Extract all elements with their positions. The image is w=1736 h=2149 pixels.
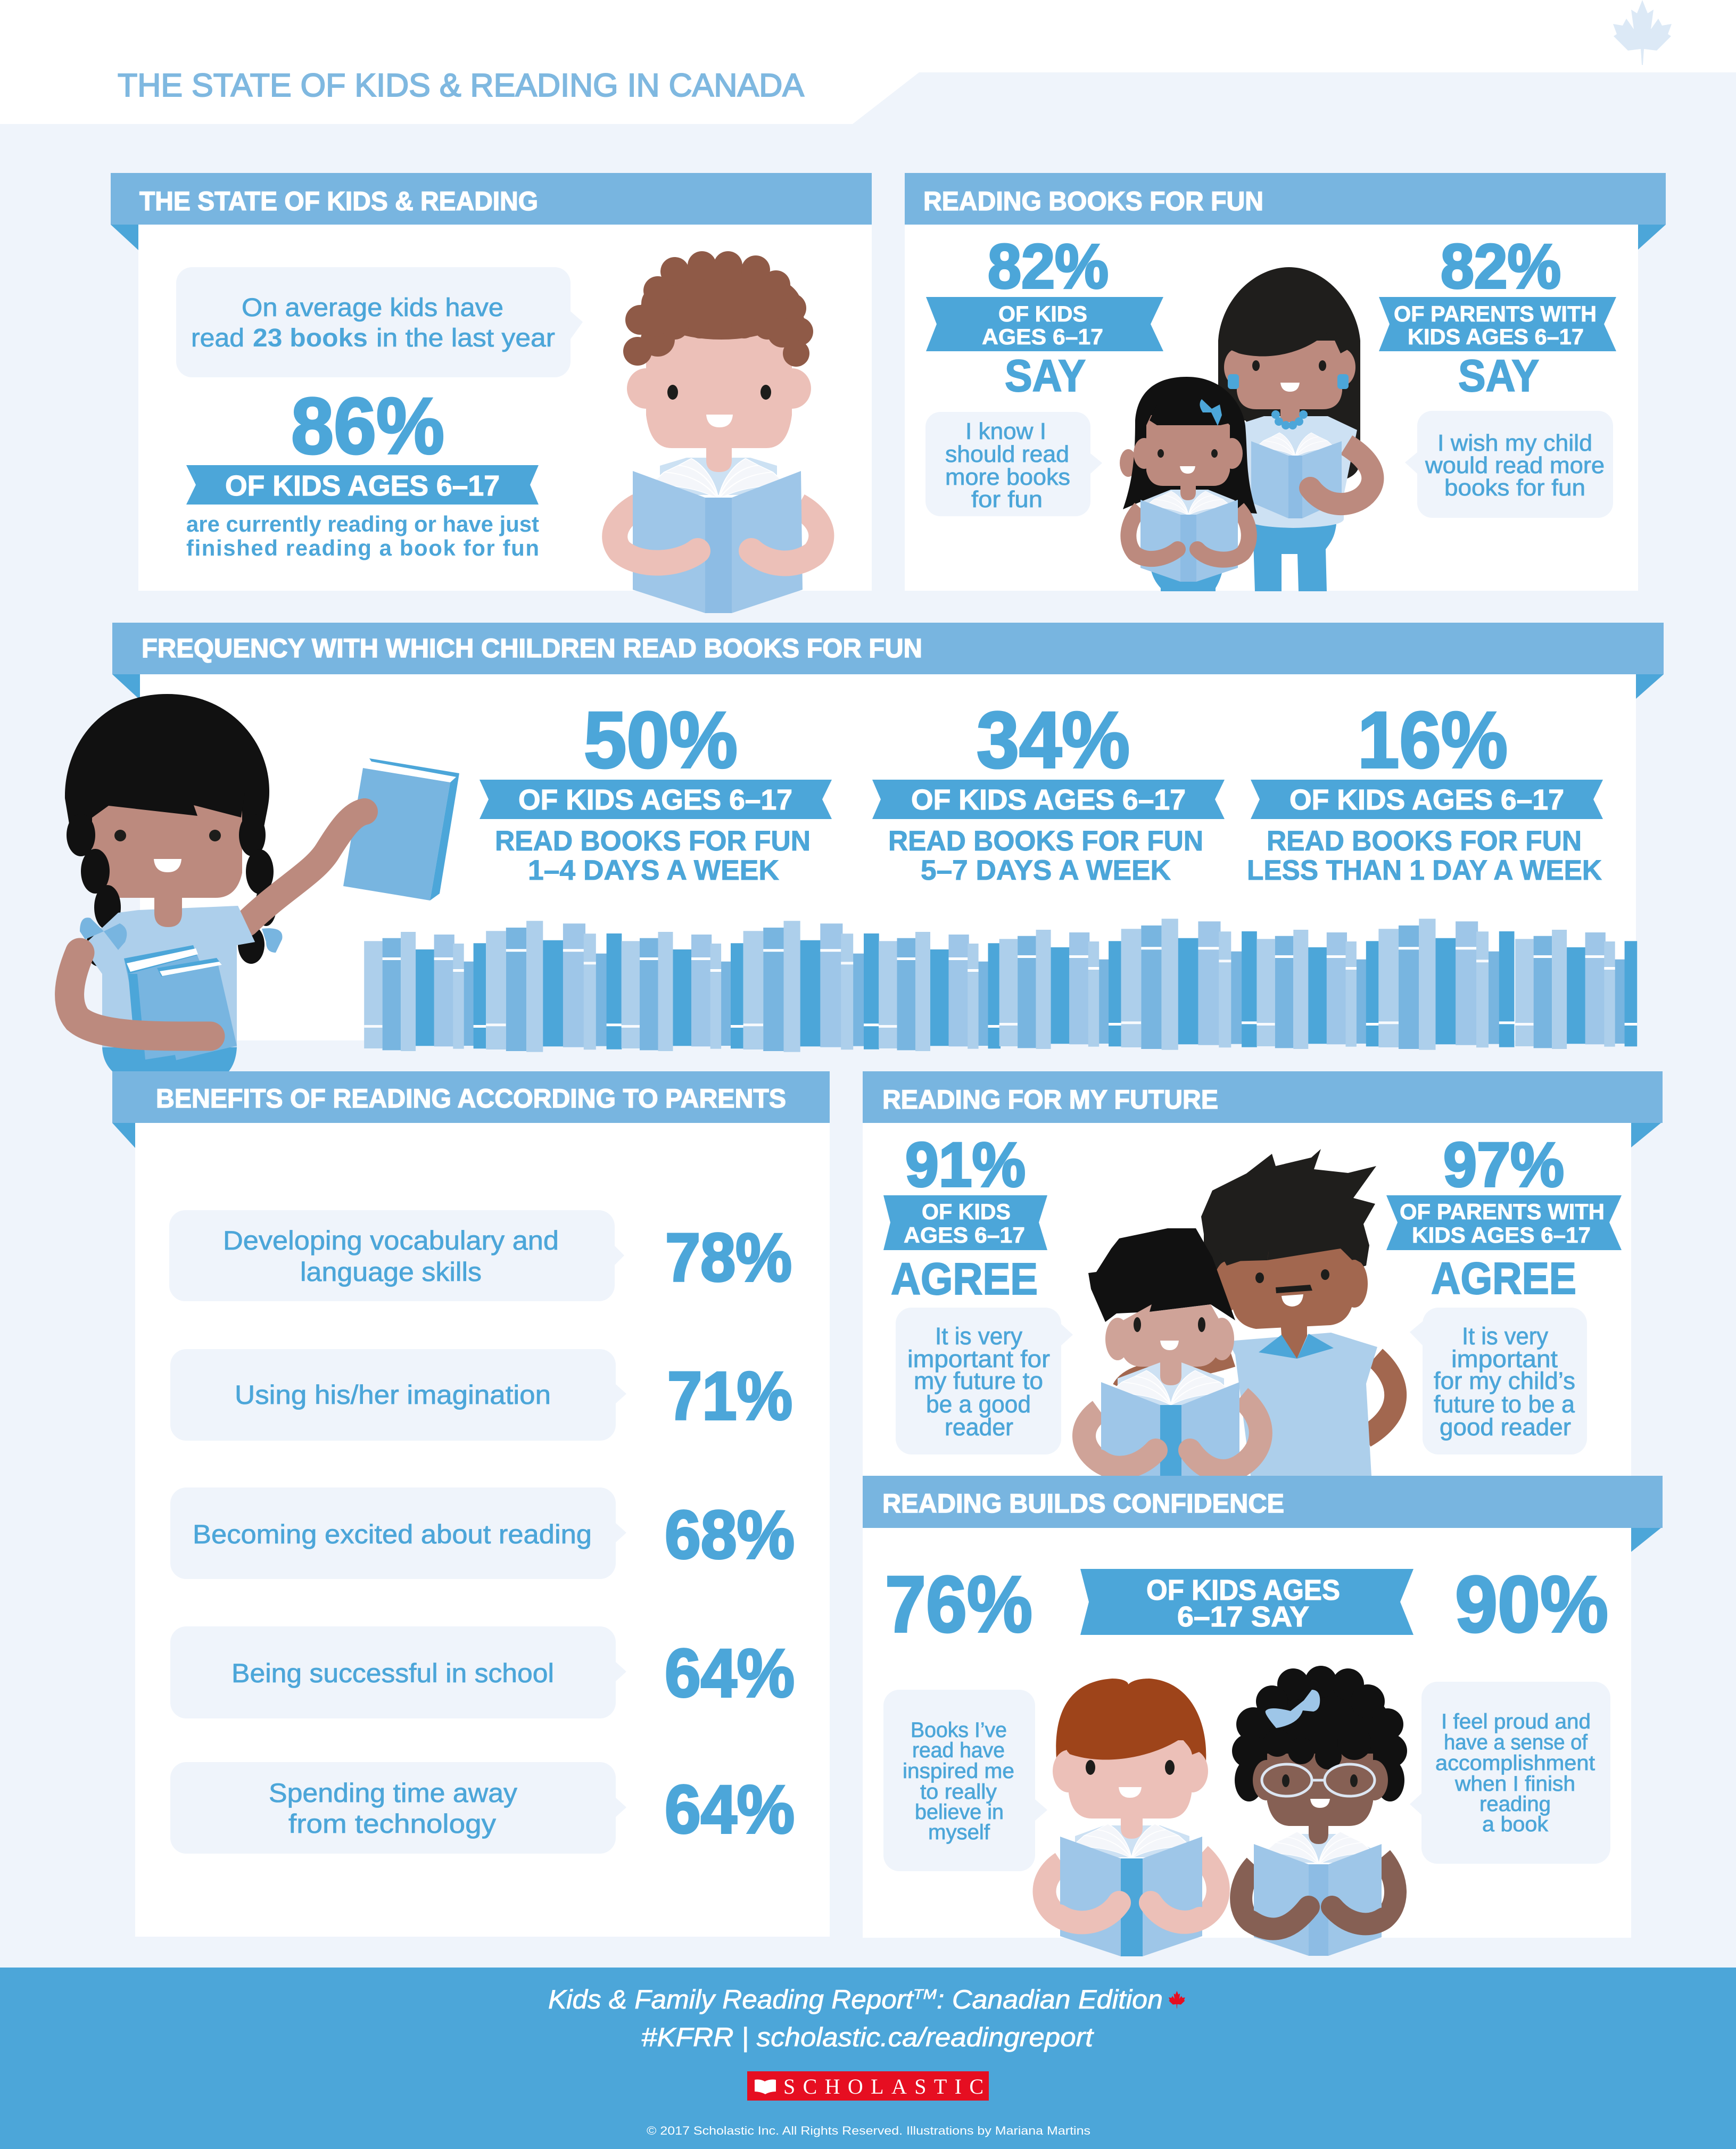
header ribbon: READING BOOKS FOR FUN [923, 186, 1263, 216]
stat: 86%: 86% [291, 381, 444, 470]
ribbon: of parents: KIDS AGES 6–17 [1412, 1222, 1591, 1247]
benefit: school 64% [170, 1626, 795, 1718]
ribbon: of parents: OF PARENTS WITH [1394, 301, 1597, 326]
speech bubble: kids: should read [945, 441, 1069, 467]
ribbon: of kids ages say: OF KIDS AGES [1146, 1574, 1340, 1606]
panel: the state of kids and reading [111, 173, 872, 613]
footer report title: : Canadian Edition [937, 1985, 1163, 2014]
benefit: excited 68% [170, 1487, 795, 1579]
scholastic logo [747, 2071, 989, 2101]
illustration: girl with glasses and book [1232, 1666, 1407, 1956]
speech bubble: kids [896, 1308, 1073, 1454]
top white banner [0, 0, 1736, 124]
speech bubble: proud: when I finish [1454, 1772, 1575, 1796]
speech bubble: kids: more books [945, 464, 1070, 490]
footer [0, 1968, 1736, 2149]
header ribbon: READING BUILDS CONFIDENCE [882, 1489, 1284, 1518]
stat: 50% [480, 695, 832, 886]
illustration: boy with book [1084, 1228, 1261, 1476]
speech bubble: proud: accomplishment [1435, 1751, 1595, 1775]
speech bubble: proud [1410, 1682, 1610, 1864]
footer report title: TM [913, 1986, 937, 2002]
illustration: mother with book [1218, 267, 1373, 591]
say label: SAY [1458, 351, 1539, 401]
stat: 34%: 5–7 DAYS A WEEK [921, 855, 1171, 886]
speech bubble: inspired [883, 1690, 1047, 1871]
text: currently reading: are currently reading or have just [186, 511, 539, 536]
benefit: technology 64%: Spending time away [269, 1778, 517, 1808]
panel: benefits of reading [112, 1071, 830, 1937]
speech bubble: kids: be a good [926, 1391, 1031, 1418]
ribbon: of parents [1386, 1195, 1622, 1250]
illustration: row of books [364, 919, 1637, 1052]
title: THE STATE OF KIDS & READING IN CANADA [118, 67, 804, 103]
speech bubble: inspired: read have [912, 1739, 1005, 1762]
stat: 16%: 16% [1358, 695, 1508, 784]
panel: reading books for fun [905, 173, 1666, 591]
ribbon: of kids ages: AGES 6–17 [904, 1222, 1025, 1247]
benefit: technology 64%: from technology [288, 1809, 496, 1839]
icon: maple leaf [1613, 0, 1672, 65]
ribbon: of kids ages: OF KIDS [998, 301, 1087, 326]
speech bubble: parents [1410, 1308, 1587, 1454]
stat: 97%: 97% [1443, 1130, 1564, 1200]
stat: 16%: READ BOOKS FOR FUN [1267, 825, 1582, 857]
stat: 76%: 76% [885, 1559, 1032, 1649]
ribbon: of kids ages [926, 297, 1163, 351]
speech bubble: parents: It is very [1462, 1323, 1548, 1350]
speech bubble: inspired: Books I’ve [911, 1718, 1007, 1742]
ribbon: of kids ages [883, 1195, 1047, 1250]
header ribbon [111, 173, 872, 250]
speech bubble: inspired: myself [928, 1821, 990, 1844]
speech bubble: kids: reader [945, 1414, 1013, 1441]
header ribbon: BENEFITS OF READING ACCORDING TO PARENTS [156, 1084, 786, 1113]
speech bubble: inspired: believe in [915, 1800, 1004, 1824]
benefit: vocabulary 78% [169, 1210, 792, 1301]
stat: 34%: READ BOOKS FOR FUN [888, 825, 1203, 857]
speech bubble: 23 books: in the last year [376, 324, 555, 352]
benefit: vocabulary 78%: 78% [665, 1220, 792, 1296]
stat: 50%: 1–4 DAYS A WEEK [528, 855, 779, 886]
speech bubble: proud: reading [1479, 1792, 1551, 1816]
icon: red maple leaf [1169, 1991, 1185, 2009]
speech bubble: proud: a book [1482, 1813, 1549, 1836]
stat: 91%: 91% [905, 1130, 1026, 1200]
stat: 82% of kids: 82% [988, 232, 1109, 302]
speech bubble: kids: I know I [965, 418, 1046, 444]
speech bubble: proud: I feel proud and [1441, 1710, 1591, 1733]
speech bubble: proud: have a sense of [1444, 1731, 1588, 1754]
speech bubble: parents: would read more [1425, 452, 1605, 478]
speech bubble: 23 books: 23 books [253, 324, 368, 352]
say label: SAY [1005, 351, 1086, 401]
stat: 50%: OF KIDS AGES 6–17 [518, 784, 792, 816]
scholastic logo: SCHOLASTIC [783, 2074, 983, 2098]
panel: reading builds confidence [863, 1476, 1663, 1956]
speech bubble: inspired: to really [920, 1780, 997, 1804]
footer report title: Kids & Family Reading Report [548, 1985, 914, 2014]
ribbon: of parents: OF PARENTS WITH [1400, 1199, 1605, 1224]
benefit: school 64%: Being successful in school [232, 1658, 554, 1688]
stat: 50%: READ BOOKS FOR FUN [495, 825, 811, 857]
ribbon: of kids ages say [1080, 1569, 1413, 1635]
speech bubble: kids: important for [907, 1345, 1050, 1373]
speech bubble: kids: my future to [914, 1367, 1043, 1394]
speech bubble: parents [1405, 411, 1613, 518]
speech bubble: parents: books for fun [1444, 475, 1585, 501]
benefit: vocabulary 78%: Developing vocabulary and [223, 1226, 559, 1255]
stat: 16%: OF KIDS AGES 6–17 [1289, 784, 1564, 816]
stat: 16% [1247, 695, 1603, 886]
ribbon: of kids ages say: 6–17 SAY [1177, 1601, 1309, 1633]
stat: 34% [872, 695, 1225, 886]
header ribbon: FREQUENCY WITH WHICH CHILDREN READ BOOKS FOR FUN [142, 633, 922, 663]
speech bubble: parents: future to be a [1434, 1391, 1575, 1418]
speech bubble: kids: It is very [935, 1323, 1022, 1350]
benefit: school 64%: 64% [665, 1635, 795, 1712]
benefit: technology 64% [170, 1762, 795, 1854]
ribbon: of parents [1379, 297, 1616, 351]
panel: reading for my future [863, 1071, 1663, 1476]
copyright: © 2017 Scholastic Inc. All Rights Reserved. Illustrations by Mariana Martins [647, 2124, 1090, 2137]
speech bubble: 23 books: read [191, 324, 244, 352]
speech bubble: parents: for my child’s [1434, 1367, 1575, 1394]
benefit: imagination 71%: Using his/her imagination [235, 1380, 551, 1410]
ribbon: of kids ages: AGES 6–17 [982, 324, 1103, 349]
agree label: AGREE [1431, 1253, 1576, 1303]
speech bubble: parents: good reader [1440, 1414, 1571, 1441]
stat: 34%: 34% [977, 695, 1130, 784]
speech bubble: parents: important [1451, 1345, 1558, 1373]
header ribbon [863, 1476, 1663, 1552]
illustration: daughter with book [1120, 377, 1257, 591]
text: currently reading [186, 511, 539, 560]
header ribbon [112, 1071, 830, 1148]
header ribbon: READING FOR MY FUTURE [882, 1085, 1218, 1114]
header ribbon [905, 173, 1666, 250]
header ribbon [863, 1071, 1663, 1147]
speech bubble: 23 books [176, 267, 583, 377]
benefit: vocabulary 78%: language skills [300, 1257, 482, 1287]
speech bubble: parents: I wish my child [1437, 430, 1592, 456]
illustration: father [1122, 1149, 1395, 1476]
benefit: imagination 71% [170, 1349, 792, 1441]
illustration: curly haired boy with book [615, 251, 821, 613]
text: currently reading: finished reading a book for fun [186, 535, 539, 560]
footer report title [548, 1985, 1163, 2014]
benefit: imagination 71%: 71% [667, 1358, 792, 1434]
header ribbon [112, 623, 1664, 700]
speech bubble: 23 books: On average kids have [242, 294, 503, 322]
ribbon: of kids ages: OF KIDS [922, 1199, 1011, 1224]
ribbon: of parents: KIDS AGES 6–17 [1408, 324, 1584, 349]
stat: 50%: 50% [584, 695, 738, 784]
panel: frequency of reading [112, 623, 1664, 1052]
stat: 90%: 90% [1455, 1559, 1608, 1649]
benefit: technology 64%: 64% [665, 1772, 795, 1848]
footer link: #KFRR | scholastic.ca/readingreport [641, 2022, 1094, 2053]
speech bubble: inspired: inspired me [903, 1759, 1014, 1783]
speech bubble: kids: for fun [971, 486, 1043, 513]
benefit: excited 68%: Becoming excited about reading [193, 1519, 592, 1549]
ribbon: of kids ages: OF KIDS AGES 6–17 [225, 470, 500, 502]
illustration: red haired boy with book [1044, 1679, 1218, 1956]
stat: 82% of parents: 82% [1441, 232, 1561, 302]
speech bubble: kids [925, 412, 1102, 516]
stat: 34%: OF KIDS AGES 6–17 [911, 784, 1186, 816]
header ribbon: THE STATE OF KIDS & READING [139, 186, 538, 216]
agree label: AGREE [891, 1254, 1038, 1304]
ribbon: of kids ages [186, 465, 539, 505]
stat: 16%: LESS THAN 1 DAY A WEEK [1247, 855, 1602, 886]
illustration: girl reaching for a book [65, 694, 459, 1071]
benefit: excited 68%: 68% [665, 1497, 795, 1573]
